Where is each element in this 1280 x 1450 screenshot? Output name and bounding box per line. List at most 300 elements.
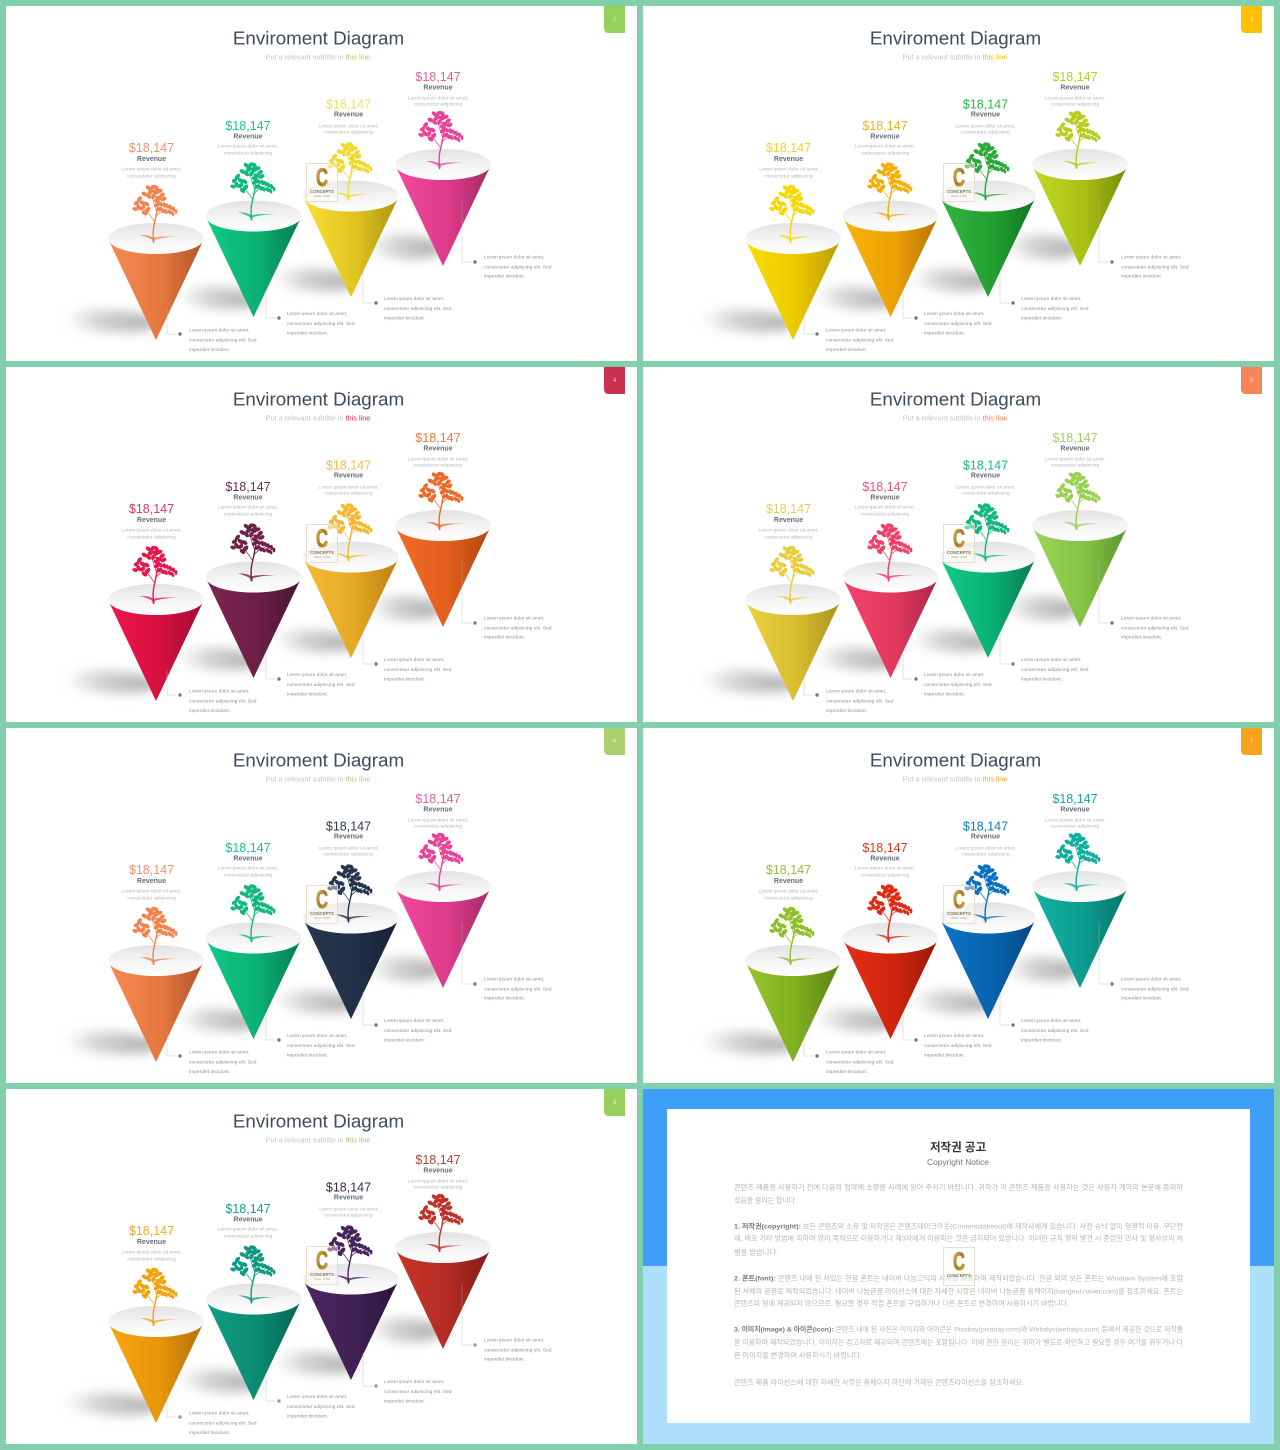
notice section 3: 른 이미지를 변경하여 사용하시기 바랍니다. — [734, 1350, 862, 1360]
disc — [1032, 871, 1128, 902]
label: Revenue — [971, 112, 1000, 118]
description: Lorem ipsum dolor sit amet, — [955, 484, 1016, 490]
description: consectetur adipiscing — [324, 490, 373, 496]
label: Revenue — [233, 134, 263, 140]
watermark logo — [306, 524, 338, 562]
cone — [396, 1250, 490, 1349]
icon: tree — [769, 545, 814, 604]
description: consectetur adipiscing — [961, 129, 1010, 135]
note: imperdiet tincidunt. — [1021, 1038, 1062, 1044]
value: $18,147 — [415, 792, 461, 806]
icon: tree — [418, 471, 464, 530]
note: Lorem ipsum dolor sit amet, — [384, 1018, 444, 1024]
icon: tree — [230, 162, 276, 220]
page number tab — [1241, 728, 1262, 755]
description: consectetur adipiscing — [861, 511, 909, 517]
description: consectetur adipiscing — [127, 173, 176, 179]
cone — [941, 920, 1035, 1019]
label: Revenue — [870, 494, 900, 502]
disc — [206, 200, 302, 232]
note: consectetur adipiscing elit. Sed — [1021, 306, 1089, 312]
note: Lorem ipsum dolor sit amet, — [826, 328, 886, 334]
note: Lorem ipsum dolor sit amet, — [484, 254, 544, 260]
label: Revenue — [774, 156, 803, 163]
icon: tree — [769, 184, 814, 243]
label: Revenue — [233, 1216, 263, 1224]
disc — [940, 180, 1036, 212]
note: Lorem ipsum dolor sit amet, — [826, 1050, 886, 1056]
description: consectetur adipiscing — [764, 173, 813, 179]
note: Lorem ipsum dolor sit amet, — [1021, 657, 1081, 663]
cone — [941, 560, 1035, 658]
leader — [266, 1376, 281, 1403]
column 3 — [303, 1180, 452, 1405]
disc — [303, 180, 399, 212]
disc — [745, 223, 841, 254]
cone — [109, 1324, 203, 1423]
disc — [108, 945, 204, 976]
note: Lorem ipsum dolor sit amet, — [924, 1033, 984, 1039]
label: Revenue — [971, 834, 1000, 840]
page number tab: 8 — [613, 1100, 617, 1106]
title: Enviroment Diagram — [233, 1110, 404, 1132]
icon: tree — [418, 1193, 464, 1252]
column 1 — [108, 141, 257, 353]
icon: tree — [327, 864, 372, 922]
note: imperdiet tincidunt. — [924, 330, 965, 336]
note: Lorem ipsum dolor sit amet, — [1021, 1018, 1081, 1024]
note: Lorem ipsum dolor sit amet, — [189, 1050, 249, 1056]
cone — [206, 1302, 300, 1400]
value: $18,147 — [225, 1202, 271, 1216]
leader — [266, 654, 281, 681]
note: consectetur adipiscing elit. Sed — [826, 699, 894, 705]
note: imperdiet tincidunt. — [1121, 996, 1162, 1002]
disc — [108, 223, 204, 254]
note: imperdiet tincidunt. — [189, 347, 230, 353]
page number tab — [604, 728, 625, 755]
watermark logo — [306, 886, 338, 924]
note: consectetur adipiscing elit. Sed — [484, 1347, 552, 1353]
description: Lorem ipsum dolor sit amet, — [318, 845, 379, 851]
column 4 — [1032, 431, 1189, 641]
notice section 1 — [734, 1222, 1183, 1256]
value: $18,147 — [1052, 70, 1098, 84]
disc — [940, 542, 1036, 572]
cone shadows — [698, 594, 1080, 695]
column 2 — [206, 119, 355, 336]
leader — [363, 1353, 378, 1388]
description: consectetur adipiscing — [127, 1256, 176, 1262]
note: imperdiet tincidunt. — [484, 635, 525, 641]
title: Enviroment Diagram — [233, 750, 404, 770]
description: consectetur adipiscing — [414, 463, 462, 469]
title: Enviroment Diagram — [233, 388, 404, 410]
panel: slide 5 — [643, 367, 1274, 722]
notice intro: 셨음을 알리는 합니다. — [734, 1196, 797, 1204]
description: consectetur adipiscing — [1051, 824, 1099, 830]
subtitle: Put a relevant subtitle in this line — [266, 1136, 370, 1144]
note: imperdiet tincidunt. — [924, 1052, 965, 1058]
description: Lorem ipsum dolor sit amet, — [121, 167, 182, 173]
disc — [108, 584, 204, 615]
column 2 — [842, 480, 992, 697]
note: imperdiet tincidunt. — [1021, 677, 1062, 683]
column 4 — [1032, 70, 1189, 280]
note: Lorem ipsum dolor sit amet, — [384, 657, 444, 663]
notice section 2: 콘텐츠의 일에 제공되지 않으므로, 필요할 경우 직접 폰트를 구입하거나 다른 폰트로 변경하여 사용하시기 바랍니다. — [734, 1298, 1069, 1308]
column 1 — [745, 502, 894, 714]
icon: tree — [418, 832, 464, 891]
label: Revenue — [774, 878, 803, 885]
disc — [745, 584, 841, 615]
panel: slide 6 — [6, 728, 637, 1083]
description: consectetur adipiscing — [414, 102, 462, 108]
note: consectetur adipiscing elit. Sed — [924, 682, 992, 688]
description: consectetur adipiscing — [764, 534, 813, 540]
note: Lorem ipsum dolor sit amet, — [484, 1337, 544, 1343]
description: Lorem ipsum dolor sit amet, — [955, 123, 1016, 129]
note: consectetur adipiscing elit. Sed — [189, 1060, 257, 1066]
icon: tree — [418, 110, 464, 169]
column 3 — [303, 458, 452, 683]
page number tab: 2 — [613, 17, 617, 23]
leader — [167, 1030, 182, 1058]
leader — [1099, 200, 1114, 264]
label: Revenue — [137, 517, 166, 524]
cone shadows — [61, 594, 443, 695]
subtitle: Put a relevant subtitle in this line — [266, 774, 370, 784]
notice intro — [734, 1182, 1183, 1204]
description: consectetur adipiscing — [961, 851, 1010, 857]
note: imperdiet tincidunt. — [287, 691, 328, 697]
column 1 — [745, 863, 894, 1075]
value: $18,147 — [225, 480, 271, 494]
description: consectetur adipiscing — [224, 1233, 272, 1239]
leader — [167, 308, 182, 336]
notice section 1: 1. 저작권(copyright): 보든 콘텐츠의 소유 및 저작권은 콘텐츠테이크아웃(Contentstakeout)에 제작사에게 있습니다. 사전 승낙 없이 일괄적 이용, 무단전 — [734, 1222, 1183, 1230]
description: Lorem ipsum dolor sit amet, — [121, 889, 182, 895]
icon: tree — [964, 142, 1010, 200]
note: consectetur adipiscing elit. Sed — [384, 667, 452, 673]
notice section 3 — [734, 1324, 1183, 1360]
icon: tree — [132, 1267, 178, 1326]
leader — [462, 922, 477, 986]
leader — [266, 293, 281, 320]
column 3 — [940, 98, 1089, 322]
cone — [396, 889, 490, 988]
description: Lorem ipsum dolor sit amet, — [855, 144, 915, 150]
note: consectetur adipiscing elit. Sed — [826, 338, 894, 344]
note: imperdiet tincidunt. — [287, 1052, 328, 1058]
note: consectetur adipiscing elit. Sed — [1121, 986, 1189, 992]
description: consectetur adipiscing — [861, 872, 909, 878]
leader — [462, 1283, 477, 1347]
leader — [1000, 631, 1015, 666]
disc — [1032, 510, 1128, 541]
column 1 — [108, 502, 257, 714]
page number tab — [604, 6, 625, 33]
note: imperdiet tincidunt. — [384, 677, 425, 683]
cone — [746, 963, 840, 1062]
note: consectetur adipiscing elit. Sed — [1021, 1028, 1089, 1034]
value: $18,147 — [862, 119, 908, 133]
note: imperdiet tincidunt. — [384, 1399, 425, 1405]
note: imperdiet tincidunt. — [826, 708, 867, 714]
icon: tree — [327, 503, 372, 562]
icon: tree — [327, 142, 372, 200]
value: $18,147 — [766, 141, 811, 155]
note: Lorem ipsum dolor sit amet, — [189, 328, 249, 334]
label: Revenue — [334, 834, 363, 840]
disc — [940, 902, 1036, 934]
leader — [167, 669, 182, 697]
description: consectetur adipiscing — [414, 1185, 462, 1191]
column 4 — [395, 70, 552, 280]
notice heading: 저작권 공고 — [930, 1140, 986, 1154]
column 3 — [303, 820, 452, 1044]
cone shadows — [61, 955, 443, 1056]
cone — [304, 1282, 398, 1380]
cone — [109, 602, 203, 701]
description: consectetur adipiscing — [764, 895, 813, 901]
note: Lorem ipsum dolor sit amet, — [1121, 254, 1181, 260]
note: consectetur adipiscing elit. Sed — [384, 306, 452, 312]
description: Lorem ipsum dolor sit amet, — [408, 1178, 468, 1184]
note: imperdiet tincidunt. — [826, 347, 867, 353]
label: Revenue — [1060, 806, 1090, 814]
note: imperdiet tincidunt. — [1021, 316, 1062, 322]
value: $18,147 — [862, 841, 908, 855]
page number tab: 5 — [1250, 378, 1254, 384]
cone — [206, 218, 300, 317]
label: Revenue — [423, 806, 453, 814]
description: Lorem ipsum dolor sit amet, — [218, 505, 278, 511]
label: Revenue — [971, 472, 1000, 480]
note: consectetur adipiscing elit. Sed — [484, 264, 552, 270]
page number tab — [604, 1089, 625, 1116]
note: Lorem ipsum dolor sit amet, — [484, 976, 544, 982]
description: Lorem ipsum dolor sit amet, — [218, 144, 278, 150]
description: Lorem ipsum dolor sit amet, — [855, 866, 915, 872]
label: Revenue — [334, 472, 363, 480]
panel: slide 8 — [6, 1089, 637, 1444]
label: Revenue — [774, 517, 803, 524]
value: $18,147 — [963, 458, 1008, 472]
panel: slide 7 — [643, 728, 1274, 1083]
description: consectetur adipiscing — [961, 490, 1010, 496]
column 1 — [108, 1224, 257, 1436]
notice section 3: 3. 이미지(image) & 아이콘(icon): 콘텐츠 내에 된 사진은 이미지와 아이콘은 Pixabay(pixabay.com)와 Webalys(webalys.com) 등에서 제공한 것으로 저작물 — [734, 1324, 1183, 1334]
description: Lorem ipsum dolor sit amet, — [758, 889, 819, 895]
icon: tree — [1055, 110, 1100, 169]
leader — [266, 1015, 281, 1042]
cone — [844, 218, 938, 317]
column 2 — [842, 841, 992, 1058]
note: Lorem ipsum dolor sit amet, — [189, 1411, 249, 1417]
disc — [206, 922, 302, 954]
disc — [303, 542, 399, 572]
subtitle: Put a relevant subtitle in this line — [903, 414, 1007, 422]
value: $18,147 — [326, 820, 371, 834]
cone — [844, 940, 938, 1039]
cone — [206, 940, 300, 1039]
notice section 1: 벌을 받습니다. — [734, 1248, 778, 1256]
icon: tree — [769, 906, 814, 965]
leader — [903, 1015, 918, 1042]
leader — [1099, 922, 1114, 986]
description: Lorem ipsum dolor sit amet, — [318, 1206, 379, 1212]
note: imperdiet tincidunt. — [1121, 635, 1162, 641]
value: $18,147 — [225, 841, 271, 855]
value: $18,147 — [1052, 431, 1098, 445]
watermark logo — [944, 524, 974, 562]
note: imperdiet tincidunt. — [287, 1413, 328, 1419]
disc — [395, 149, 491, 180]
cone shadows — [61, 233, 443, 334]
value: $18,147 — [129, 1224, 174, 1238]
leader — [363, 631, 378, 666]
note: imperdiet tincidunt. — [384, 1038, 425, 1044]
panel: copyright notice — [643, 1089, 1274, 1444]
description: Lorem ipsum dolor sit amet, — [218, 866, 278, 872]
note: consectetur adipiscing elit. Sed — [484, 986, 552, 992]
cone — [396, 528, 490, 627]
label: Revenue — [137, 878, 166, 885]
column 4 — [395, 1153, 552, 1363]
icon: tree — [230, 884, 276, 942]
description: consectetur adipiscing — [861, 150, 909, 156]
description: Lorem ipsum dolor sit amet, — [408, 817, 468, 823]
note: consectetur adipiscing elit. Sed — [287, 682, 355, 688]
watermark logo — [306, 1246, 338, 1284]
leader — [462, 200, 477, 264]
label: Revenue — [137, 156, 166, 163]
note: Lorem ipsum dolor sit amet, — [924, 311, 984, 317]
leader — [903, 654, 918, 681]
disc — [395, 871, 491, 902]
cone shadows — [698, 233, 1080, 334]
description: consectetur adipiscing — [324, 851, 373, 857]
column 4 — [1032, 792, 1189, 1002]
leader — [462, 561, 477, 625]
column 2 — [206, 841, 355, 1058]
column 4 — [395, 792, 552, 1002]
note: consectetur adipiscing elit. Sed — [287, 1404, 355, 1410]
note: imperdiet tincidunt. — [189, 1069, 230, 1075]
leader — [903, 293, 918, 320]
label: Revenue — [870, 134, 900, 140]
icon: tree — [327, 1225, 372, 1284]
leader — [804, 669, 819, 697]
disc — [395, 1232, 491, 1263]
description: consectetur adipiscing — [127, 534, 176, 540]
note: consectetur adipiscing elit. Sed — [189, 1421, 257, 1427]
notice section 2: 된 서체의 글꼴로 제작되었습니다. 네이버 나눔글꼴 라이선스에 대한 자세한 사항은 네이버 나눔글꼴 홈페이지(hangeul.naver.com)를 참조하세요. 폰트는 — [734, 1286, 1183, 1296]
column 4 — [395, 431, 552, 641]
note: Lorem ipsum dolor sit amet, — [1021, 296, 1081, 302]
cone — [304, 560, 398, 658]
title: Enviroment Diagram — [870, 750, 1041, 770]
cone — [304, 198, 398, 297]
note: Lorem ipsum dolor sit amet, — [484, 615, 544, 621]
description: Lorem ipsum dolor sit amet, — [218, 1227, 278, 1233]
page number tab — [1241, 367, 1262, 394]
note: consectetur adipiscing elit. Sed — [826, 1060, 894, 1066]
note: imperdiet tincidunt. — [484, 274, 525, 280]
description: consectetur adipiscing — [127, 895, 176, 901]
leader — [363, 992, 378, 1027]
watermark logo: CONCEPTS — [947, 1273, 971, 1278]
notice section 1: 재, 배포 기타 방법에 의하여 영리 목적으로 이용하거나 제3자에게 이용하는 것은 금지되어 있습니다. 이러한 규칙 행위 발견 시 준엄한 민사 및 형사상의 처 — [734, 1234, 1183, 1242]
note: Lorem ipsum dolor sit amet, — [826, 689, 886, 695]
description: Lorem ipsum dolor sit amet, — [1045, 817, 1105, 823]
cone — [1033, 889, 1127, 988]
cone shadows — [698, 955, 1080, 1056]
column 1 — [108, 863, 257, 1075]
value: $18,147 — [129, 141, 174, 155]
note: imperdiet tincidunt. — [484, 996, 525, 1002]
note: Lorem ipsum dolor sit amet, — [384, 1379, 444, 1385]
column 3 — [940, 820, 1089, 1044]
watermark logo — [944, 164, 974, 202]
disc — [206, 562, 302, 592]
description: consectetur adipiscing — [324, 129, 373, 135]
leader — [1000, 270, 1015, 305]
cone — [746, 241, 840, 340]
note: imperdiet tincidunt. — [1121, 274, 1162, 280]
icon: tree — [230, 1245, 276, 1304]
disc — [1032, 149, 1128, 180]
notice section 2: 2. 폰트(font): 콘텐츠 내에 된 서있는 한글 폰트는 네이버 나눔고딕의 서체를 사용하여 제작되었습니다. 한글 외의 보든 폰트는 Windows System에 포함 — [734, 1274, 1183, 1282]
column 1 — [745, 141, 894, 353]
note: imperdiet tincidunt. — [384, 316, 425, 322]
description: consectetur adipiscing — [414, 824, 462, 830]
note: consectetur adipiscing elit. Sed — [1121, 264, 1189, 270]
description: Lorem ipsum dolor sit amet, — [1045, 456, 1105, 462]
leader — [363, 270, 378, 305]
icon: tree — [1055, 832, 1100, 891]
description: Lorem ipsum dolor sit amet, — [121, 528, 182, 534]
description: consectetur adipiscing — [1051, 463, 1099, 469]
leader — [1000, 992, 1015, 1027]
note: consectetur adipiscing elit. Sed — [287, 1043, 355, 1049]
value: $18,147 — [326, 98, 371, 112]
note: consectetur adipiscing elit. Sed — [384, 1389, 452, 1395]
icon: tree — [867, 162, 912, 220]
leader — [1099, 561, 1114, 625]
label: Revenue — [1060, 446, 1090, 452]
description: Lorem ipsum dolor sit amet, — [318, 484, 379, 490]
note: consectetur adipiscing elit. Sed — [484, 625, 552, 631]
note: Lorem ipsum dolor sit amet, — [384, 296, 444, 302]
value: $18,147 — [129, 502, 174, 516]
label: Revenue — [423, 84, 453, 92]
note: consectetur adipiscing elit. Sed — [384, 1028, 452, 1034]
note: Lorem ipsum dolor sit amet, — [287, 1033, 347, 1039]
note: Lorem ipsum dolor sit amet, — [287, 311, 347, 317]
description: consectetur adipiscing — [224, 872, 272, 878]
page number tab: 6 — [613, 739, 617, 745]
cone — [396, 167, 490, 266]
disc — [108, 1306, 204, 1337]
value: $18,147 — [963, 98, 1008, 112]
watermark logo — [306, 164, 338, 202]
note: consectetur adipiscing elit. Sed — [189, 338, 257, 344]
label: Revenue — [334, 112, 363, 118]
note: imperdiet tincidunt. — [484, 1357, 525, 1363]
value: $18,147 — [225, 119, 271, 133]
